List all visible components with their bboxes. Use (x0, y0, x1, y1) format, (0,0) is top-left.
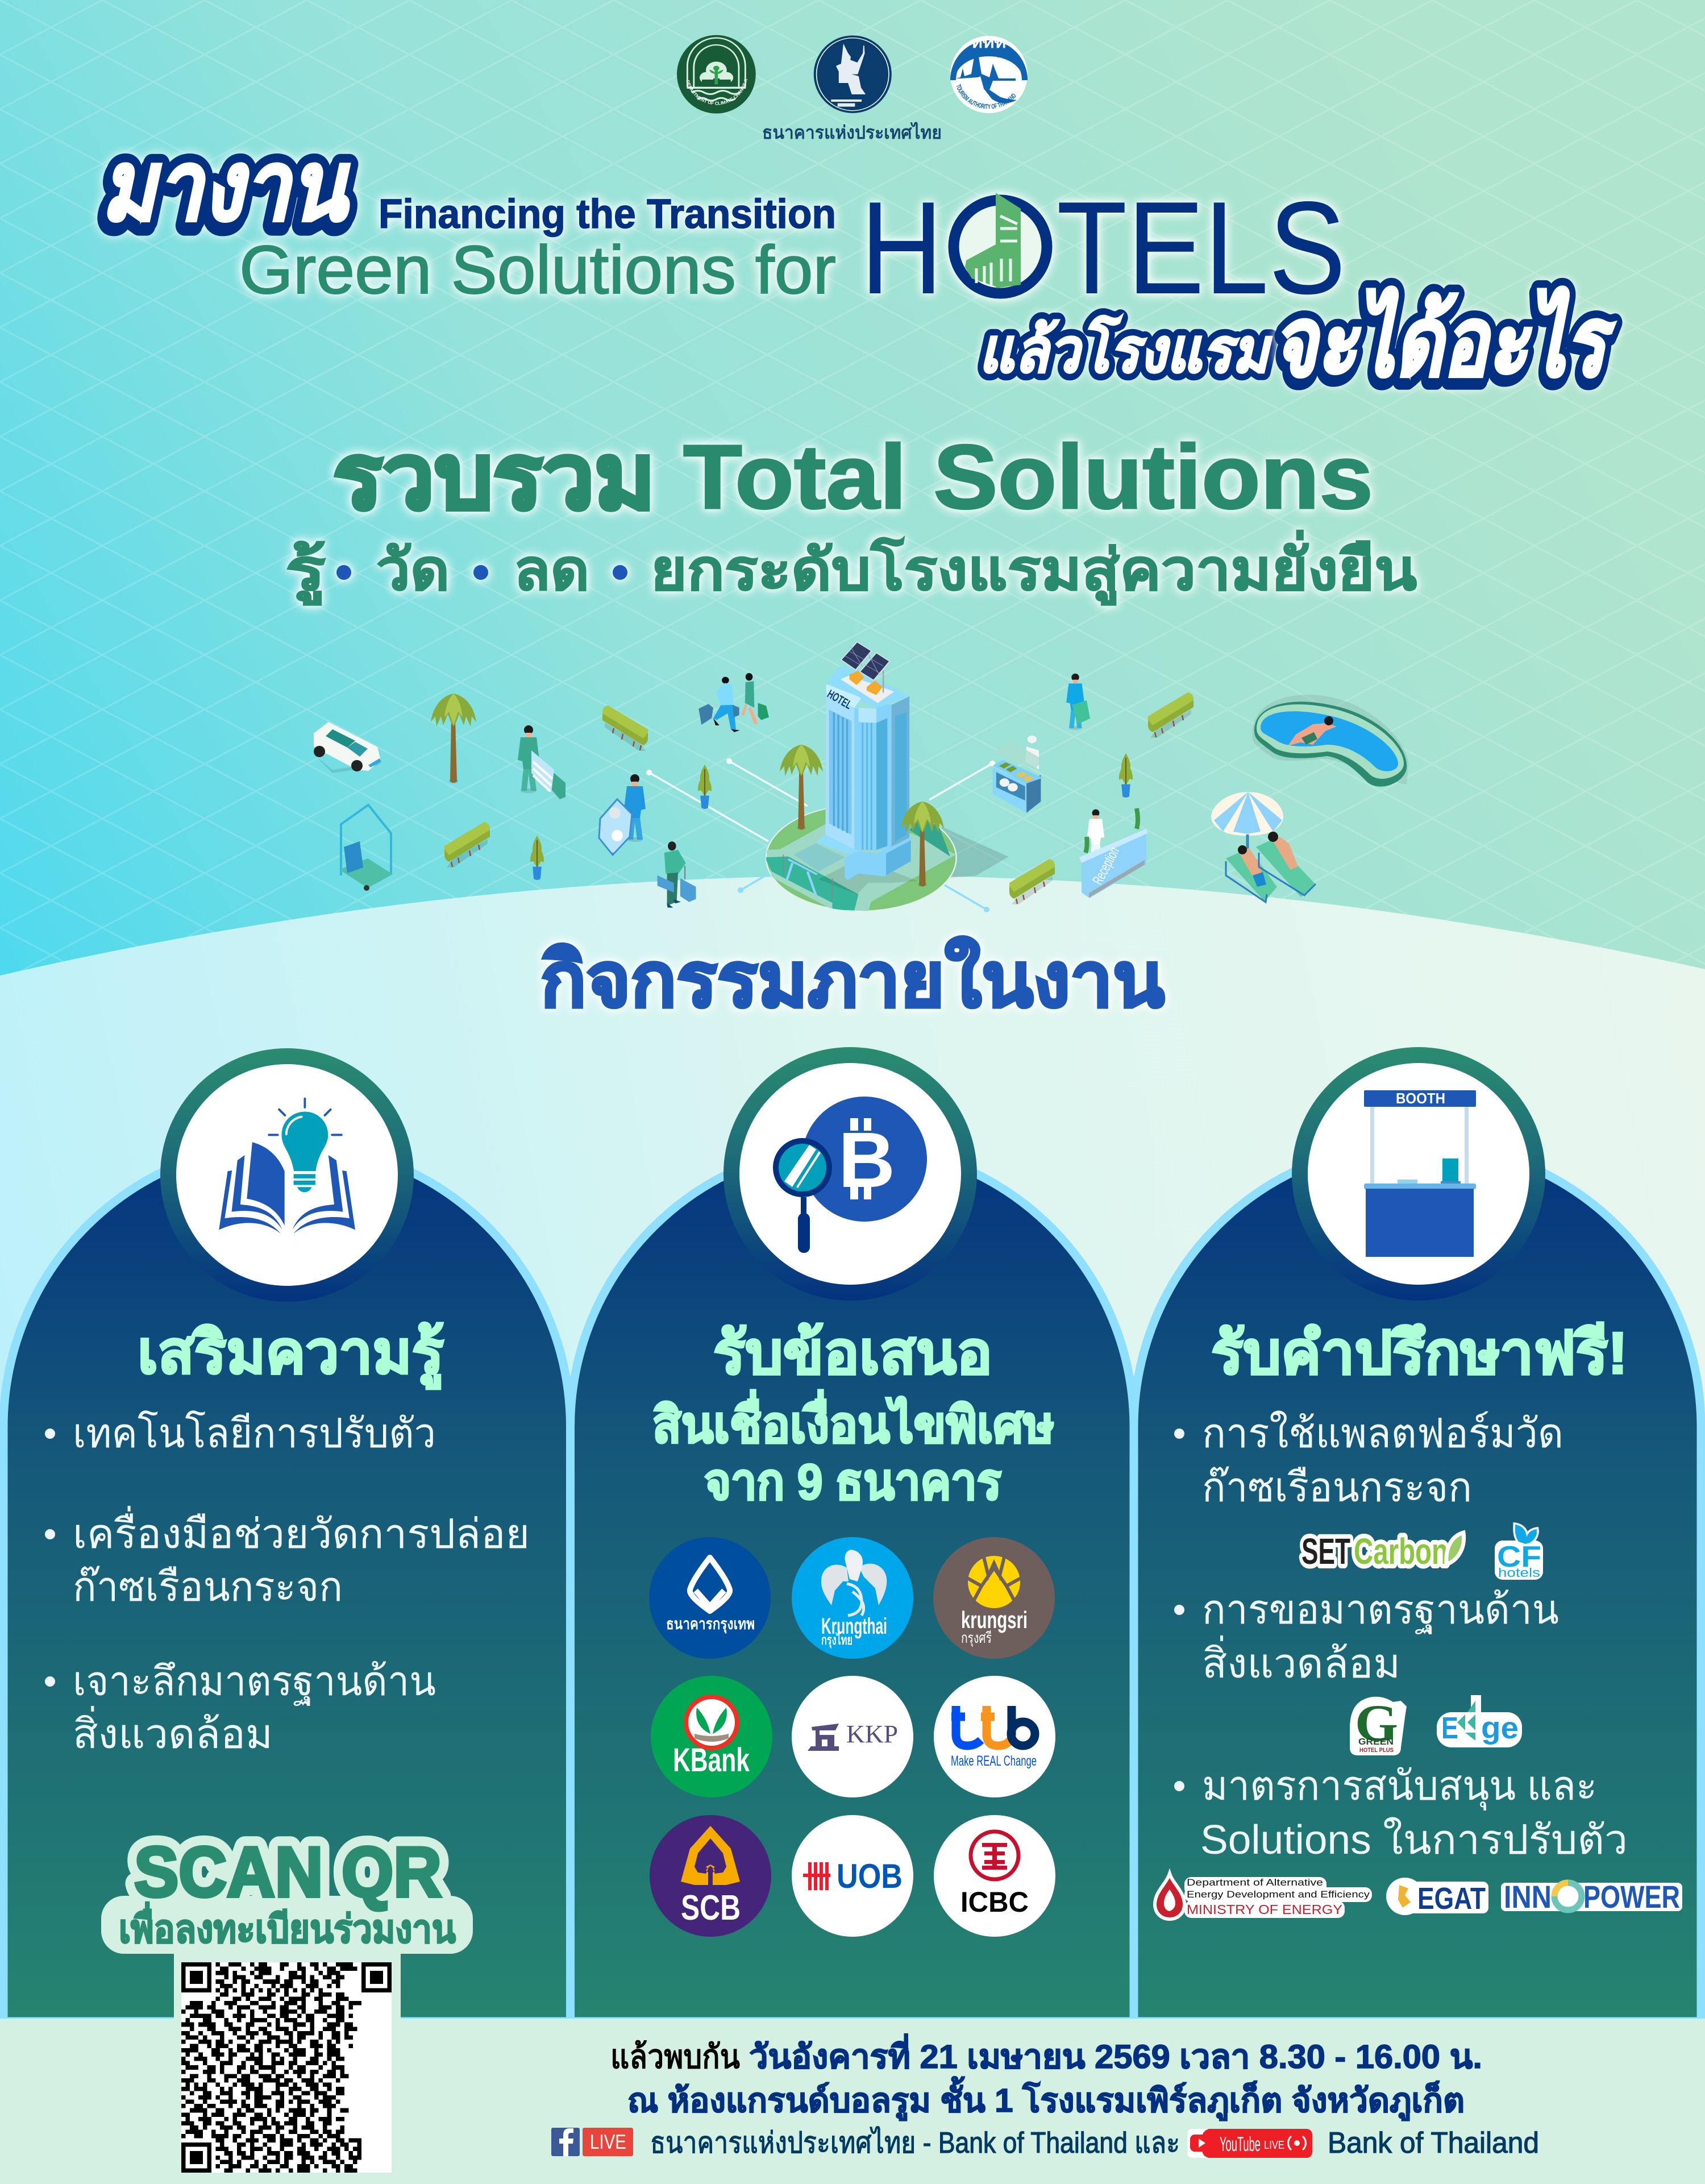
SCAN QR text: SCAN QR (134, 1833, 442, 1912)
logo: Green Hotel Plus: GREEN (1358, 1737, 1394, 1747)
live stream channels text: ธนาคารแห่งประเทศไทย - Bank of Thailand และ (650, 2126, 1180, 2160)
illustration: bench bottom left (444, 822, 490, 867)
bullet list: Solutions ในการปรับตัว (1200, 1817, 1628, 1863)
Bank of Thailand label: ธนาคารแห่งประเทศไทย (762, 122, 942, 143)
bullet list: เทคโนโลยีการปรับตัว (73, 1410, 436, 1456)
arch shape 2 (571, 1145, 1134, 2021)
bottom strip (0, 2019, 1705, 2184)
logo: Green Hotel Plus: G (1355, 1694, 1398, 1752)
logo: CF hotels (1495, 1525, 1543, 1580)
bank logo: SCB: SCB (681, 1888, 741, 1928)
bullet list: ก๊าซเรือนกระจก (1202, 1465, 1472, 1510)
bank logo: Krungsri: krungsri (961, 1606, 1028, 1633)
subtitle: รู้ วัด ลด ยกระดับ: วัด (376, 538, 450, 602)
bank logo: Krungthai: Krungthai (821, 1614, 887, 1639)
bank logo: SCB (650, 1815, 771, 1937)
illustration: reception desk (1079, 808, 1147, 898)
illustration: bellhop with trolley (599, 774, 646, 855)
heading lines: จาก 9 ธนาคาร (704, 1454, 1001, 1510)
logo: Ministry of Energy: Energy Development and Efficiency (1187, 1889, 1370, 1900)
food counter with chef (993, 736, 1043, 813)
date line: แล้วพบกัน (610, 2038, 740, 2075)
subtitle: รวบรวม Total Solutions: Total Solutions (683, 426, 1373, 528)
icon: YouTube Live (1187, 2129, 1312, 2158)
logo: INNOPOWER: INN (1504, 1879, 1552, 1915)
illustration: luggage cart (339, 805, 393, 891)
title: HOTELS wordmark (860, 175, 1346, 322)
logo: Bank of Thailand emblem (814, 35, 892, 113)
title: จะได้อะไร: จะได้อะไร (1273, 287, 1616, 396)
subtitle: รวบรวม Total Solutions (333, 426, 1373, 528)
icon ring: bitcoin and magnifier: B (838, 1116, 895, 1204)
QR code (181, 1962, 392, 2173)
panel: รับคำปรึกษาฟรี (1134, 1047, 1701, 2021)
bank logo: KBank: KBank (673, 1742, 750, 1779)
sticker background (101, 1896, 473, 1954)
title block (101, 132, 1616, 396)
heading: กิจกรรมภายในงาน: กิจกรรมภายในงาน (540, 936, 1165, 1023)
logo: Edge: E (1441, 1711, 1458, 1745)
heading lines (652, 1321, 1054, 1510)
base circle (904, 827, 1009, 881)
illustration: HOTEL sign: HOTEL (825, 687, 854, 712)
tower (783, 642, 911, 899)
heading lines: สินเชื่อเงื่อนไขพิเศษ (652, 1390, 1054, 1453)
logo: Tourism Authority of Thailand: ททท (971, 36, 1006, 51)
bullet list: การใช้แพลตฟอร์มวัด (1202, 1410, 1563, 1456)
illustration: traveller (1066, 674, 1090, 730)
icon: Facebook Live: LIVE (590, 2130, 626, 2153)
bullet list: สิ่งแวดล้อม (73, 1706, 273, 1757)
registration text: เพื่อลงทะเบียนร่วมงาน (119, 1901, 456, 1951)
bank logo: Krungthai: กรุงไทย (821, 1631, 852, 1649)
logo: INNOPOWER: POWER (1583, 1879, 1680, 1915)
lower dome background (0, 875, 1705, 2184)
bank logo: KKP (792, 1676, 913, 1797)
panel: รับข้อเสนอ (571, 1047, 1134, 2021)
venue line: ณ ห้องแกรนด์บอลรูม ชั้น 1 โรงแรมเพิร์ลภูเก็ต จังหวัดภูเก็ต (627, 2077, 1465, 2121)
illustration: bench near dome (1009, 859, 1055, 904)
illustration: palm tree centre right (901, 802, 944, 887)
bank logo: Bangkok Bank: ธนาคารกรุงเทพ (666, 1615, 755, 1634)
icon ring: booth: BOOTH (1396, 1090, 1445, 1107)
couple with luggage (698, 673, 769, 732)
subtitle: รู้ วัด ลด ยกระดับ: รู้ (285, 538, 326, 605)
bullet list: สิ่งแวดล้อม (1202, 1635, 1400, 1687)
logo: CF hotels: hotels (1498, 1566, 1540, 1580)
title: Green Solutions for: Green Solutions for (239, 232, 836, 308)
logo: Tourism Authority of Thailand: TOURISM AUTHORITY OF THAILAND (956, 84, 1016, 109)
bank logo: ttb (934, 1676, 1055, 1797)
bank logo: ICBC: ICBC (960, 1886, 1029, 1918)
subtitle: รวบรวม Total Solutions: รวบรวม (333, 426, 655, 528)
illustration: reception desk: Reception (1089, 844, 1122, 887)
title: แล้วโรงแรม: แล้วโรงแรม (979, 314, 1272, 385)
logo: INNOPOWER (1501, 1879, 1682, 1915)
connector lines (646, 758, 995, 912)
logo: Green Hotel Plus: HOTEL PLUS (1359, 1747, 1394, 1754)
partner logos (208, 35, 1028, 165)
logo: Edge (1437, 1695, 1522, 1747)
bullet list: มาตรการสนับสนุน และ (1202, 1763, 1597, 1811)
SCAN QR text: SCAN QR (134, 1833, 442, 1912)
heading: เสริมความรู้ (138, 1320, 444, 1389)
title: จะได้อะไร: จะได้อะไร (1273, 287, 1616, 396)
illustration: potted plant 3 (1119, 753, 1133, 798)
bank logo: ttb: Make REAL Change (951, 1753, 1037, 1769)
title: Financing the Transition: Financing the Transition (379, 192, 836, 237)
logo: Department of Climate Change and Environment (677, 35, 756, 114)
logo: Ministry of Energy: MINISTRY OF ENERGY (1187, 1902, 1342, 1917)
logo: Edge: ge (1481, 1711, 1519, 1745)
logo: CF hotels: CF (1497, 1541, 1541, 1573)
logo: Green Hotel Plus (1350, 1694, 1407, 1755)
illustration: tower, base and couple in reference crop coordinates (658, 642, 1043, 911)
title: HOTELS wordmark: H (860, 175, 943, 322)
hotel isometric illustration (314, 642, 1408, 912)
bank logo: UOB (792, 1815, 913, 1937)
icon: YouTube Live: YouTube (1220, 2132, 1261, 2156)
title: มางาน: มางาน (101, 132, 350, 240)
icon ring: book and bulb (160, 1048, 414, 1302)
bank logo: Bangkok Bank (649, 1537, 771, 1659)
icon: Facebook Live (551, 2128, 633, 2156)
illustration: potted plant 1 (698, 765, 712, 809)
illustration: palm tree left (431, 694, 476, 783)
man with luggage (658, 841, 696, 908)
QR backing (174, 1953, 401, 2019)
title: แล้วโรงแรม: แล้วโรงแรม (979, 314, 1272, 385)
bullet list: การขอมาตรฐานด้าน (1202, 1587, 1559, 1634)
date line: วันอังคารที่ 21 เมษายน 2569 เวลา 8.30 - 16.00 น. (749, 2033, 1482, 2075)
illustration: potted plant 2 (530, 836, 544, 880)
illustration: bench top left (602, 705, 648, 751)
bullet list: เจาะลึกมาตรฐานด้าน (73, 1659, 436, 1706)
bank logo: Krungsri: กรุงศรี (961, 1629, 992, 1647)
logo: Ministry of Energy (1155, 1874, 1372, 1919)
logo: EGAT (1386, 1878, 1488, 1916)
heading lines: รับข้อเสนอ (713, 1321, 992, 1386)
arch shape 3 (1134, 1143, 1701, 2021)
scan QR sticker (101, 1833, 473, 2173)
bank logo: UOB: UOB (837, 1857, 903, 1895)
logo: EGAT: EGAT (1417, 1882, 1486, 1916)
panel: เสริมความรู้ (3, 1048, 571, 2021)
illustration: beach umbrella and sunbeds (1211, 792, 1316, 902)
illustration: swimming pool (1252, 695, 1408, 787)
arch shape 1 (3, 1143, 571, 2021)
logo: SET Carbon: Carbon (1354, 1531, 1448, 1572)
illustration: palm tree centre left (780, 745, 823, 830)
subtitle: รู้ วัด ลด ยกระดับ: ลด (514, 538, 589, 602)
bullet list (45, 1410, 530, 1757)
logo: SET Carbon (1301, 1531, 1464, 1572)
bank logo: KKP: KKP (846, 1720, 898, 1748)
event details (551, 2033, 1539, 2160)
subtitle: รู้ วัด ลด ยกระดับ (285, 530, 1417, 605)
channel name: Bank of Thailand (1328, 2127, 1539, 2160)
bank logo: Krungthai (792, 1537, 913, 1659)
logo: Tourism Authority of Thailand (950, 36, 1028, 113)
icon: YouTube Live: LIVE (1264, 2139, 1284, 2152)
bank logo: Krungsri (933, 1537, 1055, 1659)
logo: Ministry of Energy: Department of Alternative (1187, 1877, 1323, 1888)
illustration: housekeeper with cart (518, 725, 565, 799)
icon ring: booth (1292, 1047, 1545, 1301)
illustration: bench top right (1148, 692, 1194, 738)
bullet list: ก๊าซเรือนกระจก (73, 1564, 343, 1610)
bullet list: เครื่องมือช่วยวัดการปล่อย (73, 1506, 530, 1557)
title: HOTELS wordmark: TELS (1057, 175, 1346, 322)
logo: SET Carbon: SET (1301, 1531, 1350, 1572)
bank logo: KBank (651, 1676, 772, 1797)
bullet list (1174, 1410, 1628, 1863)
bank logo: ICBC (934, 1815, 1055, 1937)
title: มางาน: มางาน (101, 132, 350, 240)
illustration: taxi (314, 722, 381, 773)
icon ring: bitcoin and magnifier (723, 1047, 977, 1301)
heading: รับคำปรึกษาฟรี! (1211, 1321, 1628, 1386)
subtitle: รู้ วัด ลด ยกระดับ: ยกระดับโรงแรมสู่ความยั่งยืน (651, 530, 1417, 605)
